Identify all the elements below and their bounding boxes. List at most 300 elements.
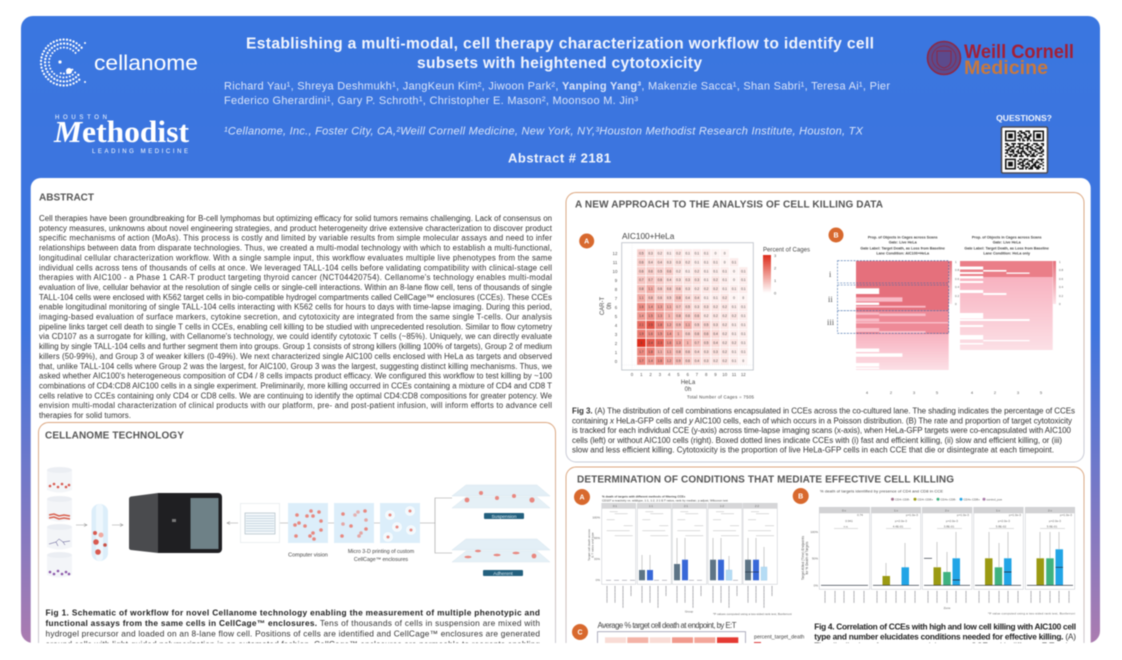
heatmap A: 0.4 [695, 296, 699, 300]
heatmap A: 0.8 [676, 314, 681, 318]
heatmap A: 0.1 [713, 260, 718, 264]
heatmap A: 0.2 [722, 359, 727, 363]
box plot B: 1:x [996, 508, 1000, 512]
heatmap A: 0.6 [704, 332, 709, 336]
heatmap A: 0.6 [639, 260, 644, 264]
heatmap A: 1 [687, 341, 689, 345]
heatmap A: CAR-T [600, 297, 606, 315]
heatmap A: 0.3 [704, 350, 709, 354]
figure 3 caption: slow and less efficient killing. Cytotoxicity is the proportion of live HeLa-GFP cells in each CCE that die or disintegrate at each timepoint. [572, 446, 1054, 455]
suspension label [484, 513, 524, 520]
heatmap A: 1 [678, 332, 680, 336]
box plot A: 66% [594, 536, 600, 540]
heatmap A: 10 [722, 372, 728, 377]
title: Establishing a multi-modal, cell therapy characterization workflow to identify cell [246, 36, 874, 52]
left cytotoxicity heatmap: i [829, 269, 832, 279]
abstract text: therapies for solid tumors. [39, 411, 131, 420]
abstract text: via CD107 as a surrogate for killing, with Cellanome's technology, we could identify cytotoxic T cells (~85%). Uniquely, we can directly evaluate [39, 332, 553, 341]
heatmap A: 0.6 [658, 278, 662, 282]
figure 3 caption: cells (left) or without AIC100 cells (right). Boxed dotted lines indicate CCEs with (i) fast and efficient killing, (ii) slow and efficient killing, or (iii) [572, 436, 1062, 445]
adherent label: Adherent [493, 571, 513, 577]
heatmap A: 0.2 [685, 260, 690, 264]
heatmap A: 3 [615, 332, 618, 337]
header: Weill Cornell Medicine logo: Weill Cornell [964, 42, 1074, 63]
heatmap A: 0.6 [695, 332, 699, 336]
heatmap A: 0.4 [685, 296, 690, 300]
box plot B: % death of targets identified by presence of CD4 and CD8 in CCE [820, 489, 943, 494]
heatmap A: HeLa [681, 380, 696, 386]
heatmap A: 0.2 [695, 287, 699, 291]
right cytotoxicity heatmap: 1 [1059, 260, 1061, 264]
heatmap A: 0.1 [732, 260, 736, 264]
heatmap A: 0.7 [648, 278, 653, 282]
heatmap A: 0.5 [667, 296, 672, 300]
questions label: QUESTIONS? [996, 113, 1052, 123]
heatmap A: 0.3 [648, 251, 653, 255]
box plot B: 3.8E-01 [944, 524, 955, 528]
heatmap A: 1.4 [648, 305, 653, 309]
heatmap A: 0.8 [648, 296, 653, 300]
legend: CD4+:CD8- [940, 498, 956, 502]
heatmap A: 0.7 [695, 341, 699, 345]
title [246, 36, 874, 72]
right cytotoxicity heatmap: 0.4 [1059, 285, 1064, 289]
heatmap A: 12 [741, 372, 746, 377]
right cytotoxicity heatmap: Prop. of Objects in Cages across Scans [972, 236, 1042, 240]
abstract text: combinations of CD4:CD8 AIC100 cells in a single experiment. Preliminarily, more killing occurred in CCEs containing a mixture of CD4 and CD8 T [39, 382, 552, 390]
heatmap A: 0.3 [713, 323, 718, 327]
heatmap A: 0.2 [704, 287, 709, 291]
abstract text: enable longitudinal monitoring of single TALL-104 cells interacting with K562 cells for hours to days with time-lapse imaging. During this period, [39, 303, 552, 312]
left cytotoxicity heatmap: 1 [955, 260, 957, 264]
right cytotoxicity heatmap: 4 [971, 390, 974, 395]
box plot A: 2:2 [755, 504, 759, 508]
box plot A: *P values computed using a two-sided rank test, Bonferroni [713, 612, 792, 616]
heatmap A: 0.5 [639, 251, 644, 255]
printing label [348, 549, 415, 563]
box plot B: 0.74 [857, 513, 863, 517]
figure 4 caption: type and number elucidates conditions needed for effective killing. (A) [814, 632, 1076, 642]
badge B: B [833, 232, 839, 240]
heatmap A: 2.1 [639, 323, 644, 327]
heatmap A: 0.4 [713, 341, 718, 345]
heatmap A: 11 [613, 260, 618, 265]
heatmap A: 0.1 [732, 287, 736, 291]
heatmap A: 0.2 [676, 251, 681, 255]
box plot A: 1:2 [720, 504, 724, 508]
figure 4 caption: The distribution of target cytotoxicity across CCEs with different E:T ratios [814, 640, 1076, 650]
abstract text: relationships between data from disparate technologies. Thus, we created a multi-modal technology with which to establish a multi-functional, [39, 244, 552, 253]
left cytotoxicity heatmap: 0.8 [955, 268, 960, 272]
box plot B: *P value computed using a two-sided rank test, Bonferroni [988, 612, 1075, 616]
heatmap A: 0.2 [722, 341, 727, 345]
abstract text: killers (50-99%), and Group 3 of weaker killers (0-49%). We next characterized single AIC100 cells enclosed with HeLa as targets and observed [39, 352, 552, 361]
heatmap A: 1 [668, 314, 670, 318]
heatmap A: 0.6 [639, 269, 644, 273]
heatmap A: 0.1 [741, 332, 746, 336]
box plot B: 2:x [1048, 508, 1052, 512]
CellCage enclosures square [380, 503, 420, 543]
figure 1 caption: Fig 1. Schematic of workflow for novel Cellanome technology enabling the measurement of multiple phenotypic and [46, 608, 540, 618]
heatmap A: 0.6 [685, 314, 690, 318]
heatmap A: 1.1 [685, 323, 690, 327]
heatmap A: 0.6 [667, 269, 672, 273]
heatmap A: 2.4 [648, 341, 653, 345]
heatmap A: 1.3 [676, 341, 681, 345]
left cytotoxicity heatmap: 5 [936, 390, 939, 395]
figure 3 caption: Fig 3. (A) The distribution of cell combinations encapsulated in CCEs across the co-cultured lane. The shading indicates the percentage of CCEs [572, 407, 1075, 416]
right cytotoxicity heatmap: 0 [1059, 302, 1061, 306]
heatmap A: 3 [640, 341, 642, 345]
heatmap A: 0.8 [676, 296, 681, 300]
adherent label [483, 570, 523, 577]
box plot B: p=1.0e-3 [957, 513, 969, 517]
heatmap A: 0.2 [713, 314, 718, 318]
box plot B: 4.4E-01 [893, 524, 904, 528]
panel: a new approach [566, 192, 1084, 462]
heatmap A: 1.6 [658, 359, 662, 363]
heatmap A: 1.1 [648, 287, 653, 291]
heatmap A: 0.2 [713, 287, 718, 291]
box plot A: 33% [594, 557, 600, 561]
heatmap A: 10 [613, 269, 618, 274]
heatmap A: 0.2 [713, 359, 718, 363]
right cytotoxicity heatmap: Gate Label: Target Death, as Loss from Baseline [964, 246, 1049, 250]
heatmap A: 0.6 [685, 359, 690, 363]
abstract text: Cell therapies have been groundbreaking for B-cell lymphomas but optimizing efficacy for solid tumors remains challenging. Lack of consensus on [39, 214, 552, 223]
heatmap A: 0.5 [704, 341, 709, 345]
heatmap A: 0.3 [667, 260, 672, 264]
heatmap A: 2 [649, 372, 652, 377]
heatmap A: 0.1 [741, 341, 746, 345]
abstract text: killing by single TALL-104 cells and further segment them into groups. Group 1 consists of strong killers (killing 100% of targets), Group 2 of medium [39, 342, 552, 351]
heatmap A: 0 [715, 251, 717, 255]
heatmap A: 1.1 [658, 350, 662, 354]
heatmap A: 0.2 [722, 350, 727, 354]
figure 1 caption: around cells with light-guided polymerization in an automated fashion. CellCage™ enclosures are permeable to reagents enabling [46, 639, 540, 649]
heatmap legend: 3 [774, 253, 777, 258]
heatmap A: 0.7 [639, 278, 644, 282]
badge A: A [579, 494, 585, 502]
heatmap A: 0 [631, 372, 634, 377]
header: Weill Cornell Medicine logo [928, 42, 1074, 79]
right cytotoxicity heatmap [960, 236, 1064, 395]
arrow: dishes to tube [76, 524, 87, 526]
box plot A: 1:1 [649, 504, 653, 508]
abstract text: specific mechanisms of action (MoAs). This process is costly and limited by variable results from simple molecular assays and need to infer [39, 234, 552, 243]
heatmap A: 0.2 [713, 305, 718, 309]
heatmap A: 0.1 [667, 251, 672, 255]
panel: Cellanome technology [38, 422, 556, 660]
heatmap A: 0.1 [695, 260, 699, 264]
printing label: Micro 3-D printing of custom [348, 549, 415, 555]
QR code [1002, 127, 1048, 173]
abstract text: TALL-104 cells were enclosed with K562 target cells in bio-compatible hydrogel compartments called CellCage™ enclosures (CCEs). These CCEs [39, 293, 552, 302]
heatmap A: 0.4 [695, 359, 699, 363]
heatmap A: 1.7 [639, 359, 644, 363]
heatmap A: 0.2 [732, 314, 736, 318]
heatmap A: 1.8 [658, 323, 662, 327]
left cytotoxicity heatmap: 0.4 [955, 285, 960, 289]
heatmap legend: 1 [774, 278, 777, 283]
heatmap A: 0.1 [695, 251, 699, 255]
3-D printing square [334, 503, 374, 543]
right cytotoxicity heatmap: 0.6 [1059, 277, 1064, 281]
legend: CD4+:CD8+ [964, 498, 980, 502]
heatmap C [596, 621, 746, 644]
heatmap A: 0.1 [704, 269, 709, 273]
abstract text: therapies with AIC100 - a Phase 1 CAR-T product targeting thyroid cancer (NCT04420754). Cellanome's technology enables multi-modal [39, 273, 552, 282]
right cytotoxicity heatmap: 0.2 [1059, 294, 1064, 298]
computer vision square [288, 503, 328, 543]
icon: four cell culture dishes [47, 467, 72, 578]
heatmap A: 1.8 [648, 350, 653, 354]
heatmap A: 0.2 [713, 278, 718, 282]
box plot B: p=2.0e-3 [946, 519, 958, 523]
heatmap A: 0.1 [704, 296, 709, 300]
heatmap A: 0.6 [658, 287, 662, 291]
heatmap A: 0.6 [667, 287, 672, 291]
left cytotoxicity heatmap: 2 [890, 390, 893, 395]
badge B [793, 488, 809, 504]
legend: CD4-:CD8- [895, 498, 910, 502]
box plot B: p=1.0e-3 [906, 513, 918, 517]
heading: DETERMINATION OF CONDITIONS THAT MEDIATE EFFECTIVE CELL KILLING [577, 474, 954, 486]
heatmap A: 0.1 [685, 269, 690, 273]
box plot B: 50% [812, 556, 818, 560]
heatmap A: 0.1 [741, 278, 746, 282]
heatmap A: 1.6 [667, 341, 672, 345]
heatmap A: 1.5 [648, 314, 653, 318]
heatmap A: 0.4 [695, 350, 699, 354]
left cytotoxicity heatmap: 3 [913, 390, 916, 395]
heatmap A: 1.9 [639, 332, 644, 336]
right cytotoxicity heatmap: 0.8 [1059, 268, 1064, 272]
heatmap A: 0.2 [704, 314, 709, 318]
left cytotoxicity heatmap [827, 236, 960, 395]
heatmap A: 0 [733, 269, 735, 273]
heatmap A: 0h [607, 303, 613, 309]
box plot B: p=1.0e-3 [1060, 513, 1072, 517]
heatmap A: 1.3 [658, 314, 662, 318]
right cytotoxicity heatmap: Gate: Live HeLa [993, 240, 1022, 244]
heatmap A: 0 [733, 278, 735, 282]
heatmap A: 0.4 [667, 278, 672, 282]
heatmap C: Average % target cell death at endpoint, by E:T [598, 621, 737, 630]
left cytotoxicity heatmap: Prop. of Objects in Cages across Scans [868, 236, 938, 240]
box plot B: 100% [810, 530, 818, 534]
abstract text: pipeline links target cell death to single T cells in CCEs, enabling cell killing to be studied with unprecedented resolution. Similar to flow cytometry [39, 322, 552, 331]
box plot A: Target cell death across [587, 529, 591, 561]
figure 3 caption [572, 407, 1075, 455]
heatmap A: 8 [615, 287, 618, 292]
suspension label: Suspension [491, 514, 517, 520]
box plot A: Group [685, 610, 693, 614]
abstract text: longitudinal cellular characterization workflow. With a single sample input, this workflow evaluates multiple live phenotypes from the same [39, 253, 553, 262]
heatmap A: 1.6 [648, 332, 653, 336]
box plot B: 5.8E-02 [996, 524, 1007, 528]
heatmap A: 0.5 [704, 323, 709, 327]
right cytotoxicity heatmap: Lane Condition: HeLa only [983, 252, 1031, 256]
badge C: C [577, 630, 583, 636]
heatmap A: 4 [668, 372, 671, 377]
arrow: tube to instrument [112, 524, 123, 526]
heatmap A: AIC100+HeLa [622, 231, 675, 241]
box plot A [587, 494, 792, 616]
heatmap A: 1.6 [639, 305, 644, 309]
heatmap A: 0.5 [695, 323, 699, 327]
left cytotoxicity heatmap: 0.2 [955, 294, 960, 298]
heatmap A: 1 [640, 372, 643, 377]
heatmap A: 0.1 [732, 350, 736, 354]
heatmap A: 0.2 [695, 269, 699, 273]
legend: CD4-:CD8+ [918, 498, 933, 502]
box plot A: 0% [596, 578, 600, 582]
figure 3 caption: containing x HeLa-GFP cells and y AIC100 cells, each of which occurs in a Poisson distribution. (B) The rate and proportion of target cytotoxicity [572, 416, 1072, 426]
abstract text: cells relative to CCEs containing only CD4 or CD8 cells. We are continuing to identify the optimal CD4:CD8 compositions for greater potency. We [39, 391, 553, 400]
heatmap A: 0.1 [741, 314, 746, 318]
box plot B [801, 489, 1075, 616]
heatmap A: 0.2 [722, 296, 727, 300]
heatmap A: 0.3 [676, 260, 681, 264]
heatmap A: 0.4 [648, 260, 653, 264]
abstract block [39, 192, 553, 420]
abstract text: imaging-based evaluation of surface markers, cytokine secretion, and cytotoxicity are integrated from the same single T-cells. Our analysis [39, 312, 552, 322]
heatmap A: 0.3 [704, 359, 709, 363]
heatmap A: 0.1 [732, 305, 736, 309]
heatmap A [600, 231, 755, 400]
heatmap A: 0 [742, 359, 744, 363]
abstract text: that, unlike TALL-104 cells where Group 2 was the largest, for AIC100, Group 3 was the largest, suggesting distinct killing mechanisms. Thus, we [39, 362, 553, 371]
heatmap A: 0.1 [741, 287, 746, 291]
figure 4 caption: Fig 4. Correlation of CCEs with high and low cell killing with AIC100 cell [814, 622, 1076, 632]
badge B [828, 228, 844, 242]
heatmap A: 0.1 [713, 269, 718, 273]
heatmap A: 0.1 [732, 332, 736, 336]
abstract text [39, 214, 553, 420]
heatmap A: 0.1 [741, 305, 746, 309]
right cytotoxicity heatmap: 2 [994, 390, 997, 395]
heatmap A: 0 [742, 296, 744, 300]
box plot B: 0.941 [845, 519, 853, 523]
heatmap A: 0.6 [648, 269, 653, 273]
heatmap A: 0.6 [676, 287, 681, 291]
heatmap A: 0.3 [695, 305, 699, 309]
abstract text: evaluation of live, cellular behavior at the resolution of single cells or single-cell interactions. Within an 8-lane flow cell, tens of thousands of single [39, 283, 553, 292]
box plot B: p=2.0e-3 [998, 519, 1010, 523]
blank page margin below the poster [0, 643, 1122, 660]
heatmap A: 0.2 [722, 314, 727, 318]
left cytotoxicity heatmap: iii [827, 317, 835, 327]
heatmap A: 0.6 [695, 314, 699, 318]
panel: determination of conditions [566, 467, 1084, 660]
left cytotoxicity heatmap: Lane Condition: AIC100+HeLa [876, 252, 930, 256]
left cytotoxicity heatmap: Gate Label: Target Death, as Loss from Baseline [860, 246, 945, 250]
left cytotoxicity heatmap: ii [828, 294, 833, 304]
heatmap A: 1.4 [639, 314, 644, 318]
box plot A: CD107 a reactivity vs. wildtype, 1:1, 1:2, 2:1 E:T ratios, rank by median, p.adjust, Wilcoxon test [602, 498, 728, 502]
badge A: A [584, 238, 589, 246]
heatmap legend: 0 [774, 290, 777, 296]
heatmap A: 0h [685, 387, 691, 393]
box plot B: n.s. [844, 524, 849, 528]
heatmap legend: 2 [774, 266, 777, 270]
heatmap A: Total Number of Cages = 7505 [687, 394, 755, 400]
left cytotoxicity heatmap: 0 [955, 302, 957, 306]
heatmap A: 1.1 [667, 305, 672, 309]
heatmap A: 0 [724, 260, 726, 264]
heading: A NEW APPROACH TO THE ANALYSIS OF CELL KILLING DATA [575, 200, 883, 210]
authors: Richard Yau¹, Shreya Deshmukh¹, JangKeun Kim², Jiwoon Park², Yanping Yang³, Makenzie Sacca¹, Shan Sabri¹, Teresa Ai¹, Pier [224, 80, 890, 92]
heatmap A: 1.7 [639, 350, 644, 354]
heatmap A: 0 [615, 359, 618, 364]
heatmap A: 0.8 [676, 350, 681, 354]
heatmap A: 0.3 [704, 305, 709, 309]
heatmap A: 0.5 [685, 305, 690, 309]
header: cellanome logo [41, 40, 198, 86]
heatmap A: 1.2 [667, 359, 672, 363]
legend: control_pos [986, 498, 1003, 502]
right cytotoxicity heatmap: 3 [1017, 390, 1020, 395]
heatmap A: 0.5 [658, 269, 662, 273]
heatmap A: 0.1 [713, 296, 718, 300]
authors: Federico Gherardini¹, Gary P. Schroth¹, Christopher E. Mason², Moonsoo M. Jin³ [224, 95, 638, 107]
heatmap A: 0.2 [722, 332, 727, 336]
suspension plates [452, 485, 550, 508]
box plot A: 2:1 [684, 504, 688, 508]
box plot A: E:T ratios and type [590, 532, 594, 558]
heatmap A: 0.2 [676, 269, 681, 273]
badge A [574, 489, 590, 505]
heatmap A: 0.3 [713, 350, 718, 354]
heatmap A: 5 [615, 314, 618, 319]
arrow: instrument to flow cell [227, 522, 238, 524]
header: Houston Methodist logo: HOUSTON [55, 115, 107, 121]
heatmap A: 4 [615, 323, 618, 328]
heatmap A: 5 [677, 372, 680, 377]
heatmap A: 9 [615, 278, 618, 283]
figure 4 caption [814, 622, 1076, 650]
heatmap A: 0.1 [722, 269, 727, 273]
heatmap legend: Percent of Cages [763, 248, 810, 254]
heatmap A: 1.3 [658, 305, 662, 309]
heatmap A: 0.1 [722, 287, 727, 291]
abstract text: potency measures, unknowns about novel engineering strategies, and product heterogeneity drive extensive characterization to discover product [39, 224, 553, 233]
figure 3 caption: is tracked for each individual CCE (y-axis) across time-lapse imaging scans (x-axis), when HeLa-GFP targets were co-encapsulated with AIC100 [572, 426, 1072, 435]
heatmap A: 0.2 [658, 251, 662, 255]
header: Houston Methodist logo: Methodist [53, 114, 190, 149]
heatmap A: 0 [724, 251, 726, 255]
heatmap A: 0.8 [639, 287, 644, 291]
abstract text: asked whether AIC100's heterogeneous composition of CD4 / 8 cells impacts product efficacy. We configured this workflow to test killing by ~100 [39, 372, 553, 381]
heatmap A: 0.6 [685, 350, 690, 354]
heatmap A: 2.5 [648, 323, 653, 327]
box plot B: p=2.0e-3 [1049, 519, 1061, 523]
heatmap A: 0.3 [685, 278, 690, 282]
box plot B: 0% [814, 584, 818, 588]
heatmap A: 0.6 [658, 296, 662, 300]
main white panel [31, 178, 1091, 650]
heatmap A: 0.1 [732, 323, 736, 327]
figure 1 caption: functional assays from the same cells in CellCage™ enclosures. Tens of thousands of cells in suspension are mixed with [46, 618, 540, 628]
heatmap A: 0.2 [722, 323, 727, 327]
heatmap A: 2 [615, 341, 618, 346]
box plot B: Zone [944, 606, 951, 610]
heatmap A: 0.1 [685, 251, 690, 255]
heading: CELLANOME TECHNOLOGY [45, 430, 184, 442]
heatmap A: 0 [733, 296, 735, 300]
heatmap C legend [753, 634, 805, 644]
